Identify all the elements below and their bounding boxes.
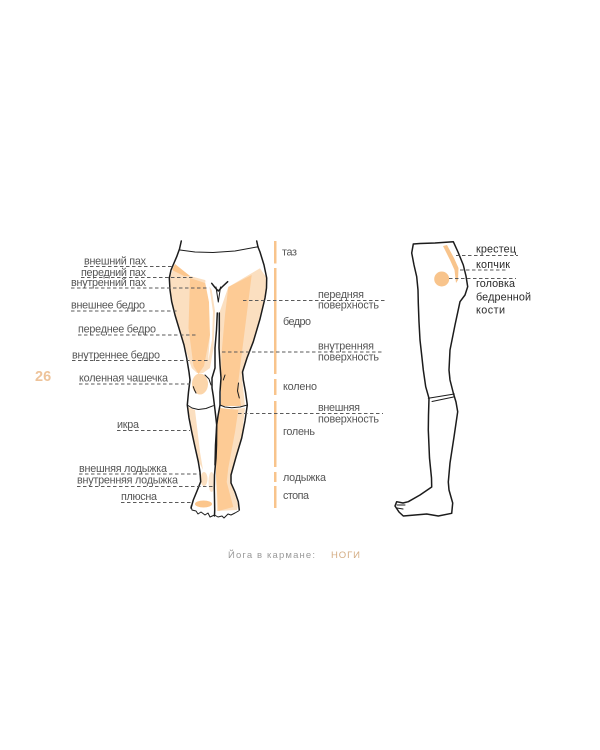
side view labels	[449, 244, 531, 316]
side view labels: головка	[476, 278, 515, 290]
highlighted zones: right leg	[216, 268, 267, 511]
left labels: leg parts: коленная чашечка	[79, 372, 168, 384]
right labels: zones and surfaces: голень	[283, 426, 315, 438]
right labels: zones and surfaces: внешняя	[318, 402, 360, 414]
left labels: leg parts: внешний пах	[84, 256, 147, 268]
left labels: leg parts: внешняя лодыжка	[79, 463, 167, 475]
left labels: leg parts: икра	[117, 419, 139, 431]
sacrum and coccyx highlight	[443, 245, 458, 283]
side view labels: копчик	[476, 259, 510, 271]
right labels: zones and surfaces	[222, 246, 385, 502]
left labels: leg parts: переднее бедро	[78, 324, 156, 336]
footer: НОГИ	[331, 550, 360, 561]
side view labels: кости	[476, 304, 505, 316]
right labels: zones and surfaces: поверхность	[318, 414, 379, 426]
front view of legs	[169, 241, 267, 518]
side view labels: бедренной	[476, 292, 531, 304]
page number: 26	[35, 369, 51, 385]
footer: Йога в кармане:	[228, 549, 315, 561]
highlighted zones: left leg	[169, 264, 215, 508]
footer	[228, 549, 360, 561]
right labels: zones and surfaces: поверхность	[318, 300, 379, 312]
right labels: zones and surfaces: передняя	[318, 289, 364, 301]
left labels: leg parts: внутренний пах	[71, 277, 147, 289]
knee band lines	[428, 394, 454, 402]
left labels: leg parts: передний пах	[81, 267, 147, 279]
left labels: leg parts: внешнее бедро	[71, 300, 145, 312]
right labels: zones and surfaces: стопа	[283, 490, 309, 502]
right labels: zones and surfaces: колено	[283, 381, 317, 393]
left labels: leg parts: плюсна	[121, 491, 157, 503]
left labels: leg parts: внутренняя лодыжка	[77, 474, 178, 486]
right labels: zones and surfaces: бедро	[283, 316, 311, 328]
side leg outline	[395, 242, 468, 516]
right labels: zones and surfaces: поверхность	[318, 352, 379, 364]
femoral head highlight	[434, 272, 449, 286]
side view labels: крестец	[476, 244, 516, 256]
right labels: zones and surfaces: внутренняя	[318, 340, 374, 352]
left labels: leg parts: внутреннее бедро	[72, 350, 160, 362]
left labels: leg parts	[71, 256, 215, 503]
right labels: zones and surfaces: таз	[282, 246, 297, 258]
side view of leg	[395, 242, 468, 516]
body zone bars	[274, 241, 276, 508]
leg outlines	[169, 241, 267, 518]
right labels: zones and surfaces: лодыжка	[283, 472, 326, 484]
